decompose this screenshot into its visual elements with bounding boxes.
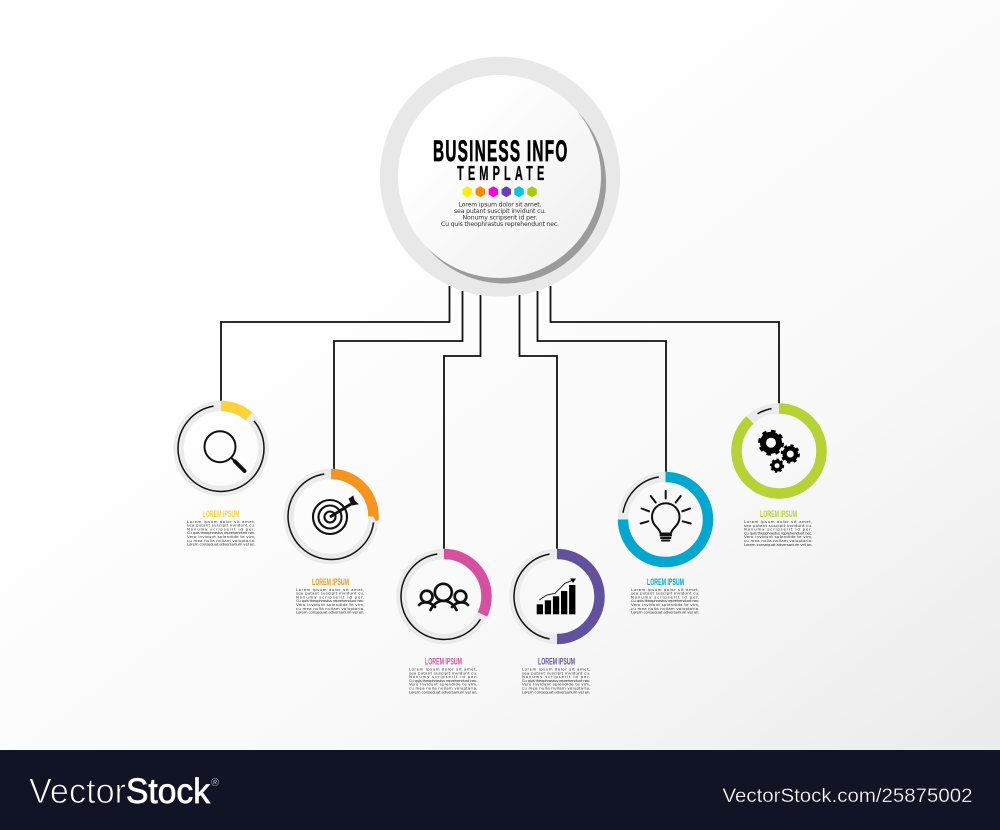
caption 6: cu mea nulla nullam voluptaria. [744,538,812,543]
icon: light bulb [641,491,691,540]
caption 3 [409,657,478,694]
caption 3: cu mea nulla nullam voluptaria. [409,686,478,690]
caption 2: Vero invidunt splendide te vim, [296,602,364,607]
intro text: Cu quis theophrastus reprehendunt nec. [441,221,559,228]
caption 2: sea putant suscipit invidunt cu. [296,591,364,596]
caption 3: Vero invidunt splendide te vim, [409,682,478,687]
caption 2: Lorem ipsum dolor sit amet, [296,587,364,592]
caption 3: Lorem consequat adversarium vel an. [409,689,478,694]
caption 2: Cu quis theophrastus reprehendunt nec. [296,598,365,603]
footer logo: Stock [126,772,210,811]
connector lines [221,286,779,550]
caption 1: Cu quis theophrastus reprehendunt nec. [187,530,256,535]
caption 5: Lorem ipsum dolor sit amet, [631,587,700,592]
node 4: growth chart [514,554,600,640]
central title circle [380,57,620,297]
caption 5 [631,577,700,615]
caption 4: Lorem ipsum dolor sit amet, [522,666,590,672]
icon: target [313,496,358,534]
node 5: idea [622,476,708,562]
node 6: gears [736,408,822,494]
footer logo [29,772,219,811]
icon: people [419,584,468,610]
caption 3: Lorem ipsum dolor sit amet, [409,666,478,672]
caption 1: sea putant suscipit invidunt cu. [187,523,256,528]
caption 6: Nonumy scripserit id per. [744,527,812,532]
intro text [441,202,559,228]
caption 6: Cu quis theophrastus reprehendunt nec. [744,530,813,535]
caption 1 [187,509,256,547]
caption 6: Vero invidunt splendide te vim, [744,534,812,539]
node 1: search [178,406,264,492]
caption 5: Vero invidunt splendide te vim, [631,602,700,607]
footer logo: ® [211,777,219,789]
caption 4 [522,657,590,694]
node 3: team [401,554,487,640]
caption 4: Vero invidunt splendide te vim, [522,682,590,687]
caption 5: Nonumy scripserit id per. [631,594,700,599]
caption 4: cu mea nulla nullam voluptaria. [522,686,590,690]
caption 6: LOREM IPSUM [760,509,797,519]
icon: bar chart with arrow [537,578,576,614]
intro text: Nonumy scripserit id per. [462,214,538,222]
caption 4: LOREM IPSUM [538,657,575,667]
caption 1: Nonumy scripserit id per. [187,526,256,531]
footer image id: VectorStock.com/25875002 [722,785,972,807]
caption 3: Nonumy scripserit id per. [409,674,478,679]
hexagon colour row [463,186,537,197]
caption 4: sea putant suscipit invidunt cu. [522,670,590,675]
caption 5: Cu quis theophrastus reprehendunt nec. [631,598,700,603]
caption 2: cu mea nulla nullam voluptaria. [296,606,364,611]
intro text: sea putant suscipit invidunt cu. [454,208,546,215]
caption 6 [744,509,812,547]
caption 1: Lorem ipsum dolor sit amet, [187,519,256,524]
icon: magnifier [204,431,244,471]
caption 1: LOREM IPSUM [202,509,240,519]
subtitle: TEMPLATE [457,163,548,185]
caption 6: Lorem consequat adversarium vel an. [744,542,812,547]
caption 1: cu mea nulla nullam voluptaria. [187,538,256,543]
caption 3: Cu quis theophrastus reprehendunt nec. [409,678,478,683]
caption 3: sea putant suscipit invidunt cu. [409,670,478,675]
footer logo: Vector [29,772,126,811]
footer bar [0,750,1000,830]
caption 4: Nonumy scripserit id per. [522,674,590,679]
caption 2: LOREM IPSUM [312,577,349,587]
icon: gears [760,431,799,472]
caption 5: cu mea nulla nullam voluptaria. [631,606,700,611]
caption 1: Vero invidunt splendide te vim, [187,534,256,539]
caption 4: Lorem consequat adversarium vel an. [522,689,590,694]
caption 2: Lorem consequat adversarium vel an. [296,610,364,615]
caption 2 [296,577,364,615]
caption 4: Cu quis theophrastus reprehendunt nec. [522,678,591,683]
caption 6: Lorem ipsum dolor sit amet, [744,519,812,524]
caption 5: Lorem consequat adversarium vel an. [631,610,700,615]
caption 3: LOREM IPSUM [425,657,462,667]
caption 5: sea putant suscipit invidunt cu. [631,591,700,596]
caption 6: sea putant suscipit invidunt cu. [744,523,812,528]
title: BUSINESS INFO [433,135,568,167]
caption 2: Nonumy scripserit id per. [296,594,364,599]
node 2: target [288,474,374,560]
intro text: Lorem ipsum dolor sit amet, [458,202,542,208]
caption 1: Lorem consequat adversarium vel an. [187,542,256,547]
caption 5: LOREM IPSUM [647,577,684,587]
